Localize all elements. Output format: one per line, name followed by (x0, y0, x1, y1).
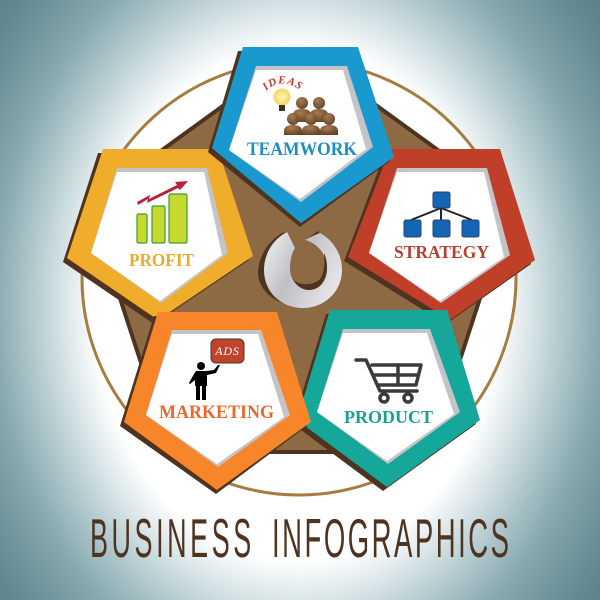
icon: team of people (284, 97, 338, 135)
panel: teamwork (208, 47, 394, 227)
panel: marketing (120, 312, 311, 494)
icon: presenter figure (189, 362, 220, 400)
central ring icon (258, 231, 342, 308)
icon: ads board (211, 339, 244, 363)
panel: product (293, 310, 480, 491)
label: marketing: MARKETING (159, 402, 274, 423)
label: profit: PROFIT (129, 250, 194, 270)
title: BUSINESS (90, 509, 251, 570)
icon: ads board: ADS (214, 344, 240, 358)
title: INFOGRAPHICS (272, 509, 509, 570)
central brown pentagon (89, 50, 511, 452)
label: teamwork: TEAMWORK (247, 139, 357, 160)
label: product: PRODUCT (344, 407, 433, 427)
title (90, 509, 509, 570)
panel: profit (63, 149, 253, 324)
outer circle (82, 61, 516, 495)
label: strategy: STRATEGY (394, 242, 489, 262)
panel: strategy (344, 149, 535, 324)
icon: org chart (404, 192, 479, 237)
icon: bar chart with arrow (137, 181, 188, 243)
icon: ideas bulb (262, 76, 303, 111)
icon: ideas bulb: IDEAS (262, 76, 303, 91)
icon: shopping cart (356, 360, 421, 402)
